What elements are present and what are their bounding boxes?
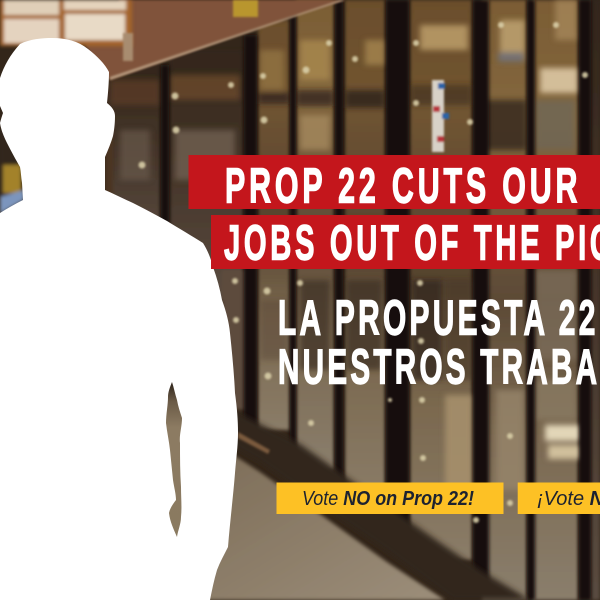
button: Vote NO on Prop 22 xyxy=(276,482,504,514)
yellow sign on ceiling xyxy=(233,0,258,17)
Spanish headline xyxy=(278,290,600,394)
ceiling lights xyxy=(0,0,132,46)
arm gap backdrop xyxy=(160,378,188,543)
button: Spanish vote NO xyxy=(518,482,600,514)
kick plate below doors xyxy=(232,410,530,600)
store shelf highlights and dark bands xyxy=(110,0,582,505)
red banner: Prop 22 headline line 1: PROP 22 CUTS OUR xyxy=(225,158,581,213)
coloured products on shelf xyxy=(432,80,449,152)
button: Vote NO on Prop 22: Vote NO on Prop 22! xyxy=(302,488,474,510)
ceiling edge highlight xyxy=(110,0,345,80)
silhouette of a worker, with arm gap xyxy=(0,38,238,600)
ceiling soffit xyxy=(85,0,345,80)
floor xyxy=(205,454,445,600)
shelf rail glint xyxy=(238,432,270,454)
door frames xyxy=(161,0,591,600)
bokeh lights xyxy=(138,22,588,523)
